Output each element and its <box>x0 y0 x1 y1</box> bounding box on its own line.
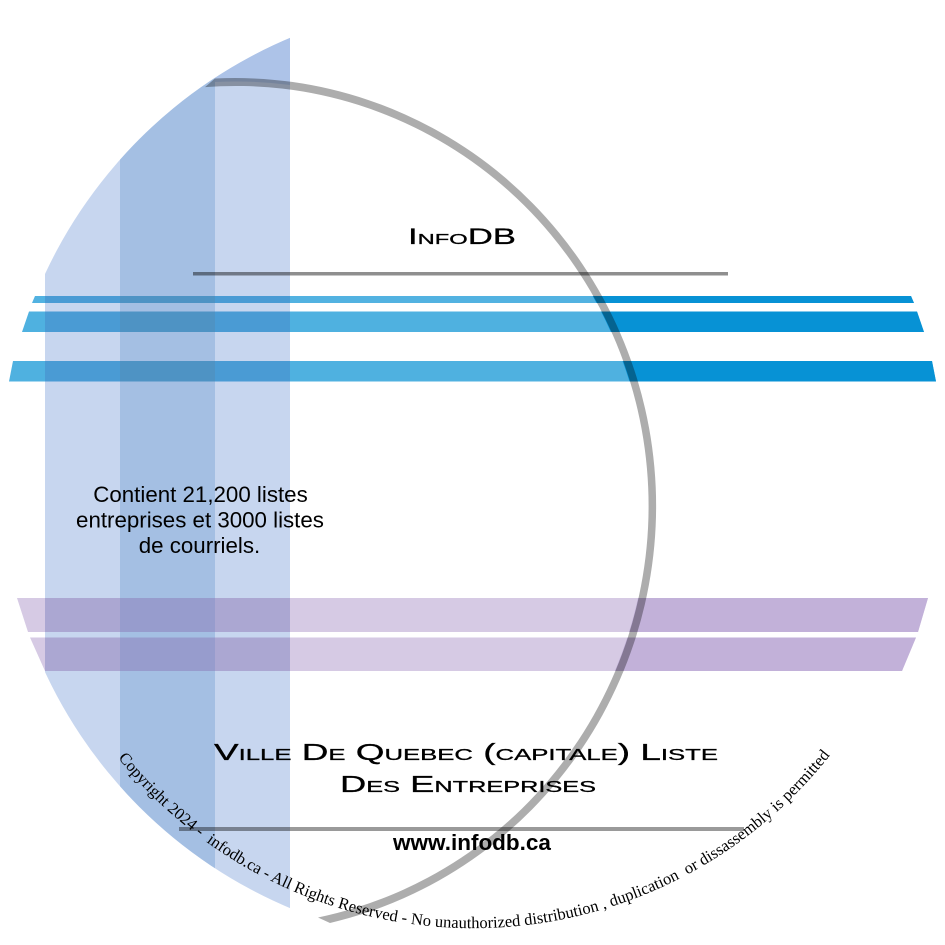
text block: contents description <box>76 482 324 558</box>
curved copyright notice: Copyright 2024 - infodb.ca - All Rights Reserved - No unauthorized distribution , duplication or dissassembly is permitted <box>120 748 830 928</box>
text block: contents description: entreprises et 3000 listes <box>76 508 324 532</box>
website url: www.infodb.ca <box>392 830 551 855</box>
top rule <box>193 272 728 276</box>
bottom rule <box>179 827 744 831</box>
panel: purple horizontal bands <box>17 598 928 671</box>
heading: product title: Ville De Quebec (capitale) Liste <box>214 739 718 765</box>
text block: contents description: de courriels. <box>139 533 260 558</box>
heading: InfoDB: InfoDB <box>408 224 516 249</box>
gray crescent arc <box>205 78 656 923</box>
heading: product title <box>214 739 718 797</box>
panel: blue vertical columns <box>45 0 290 945</box>
heading: product title: Des Entreprises <box>340 771 596 797</box>
text block: contents description: Contient 21,200 listes <box>93 482 308 507</box>
panel: blue horizontal bands <box>9 296 936 382</box>
